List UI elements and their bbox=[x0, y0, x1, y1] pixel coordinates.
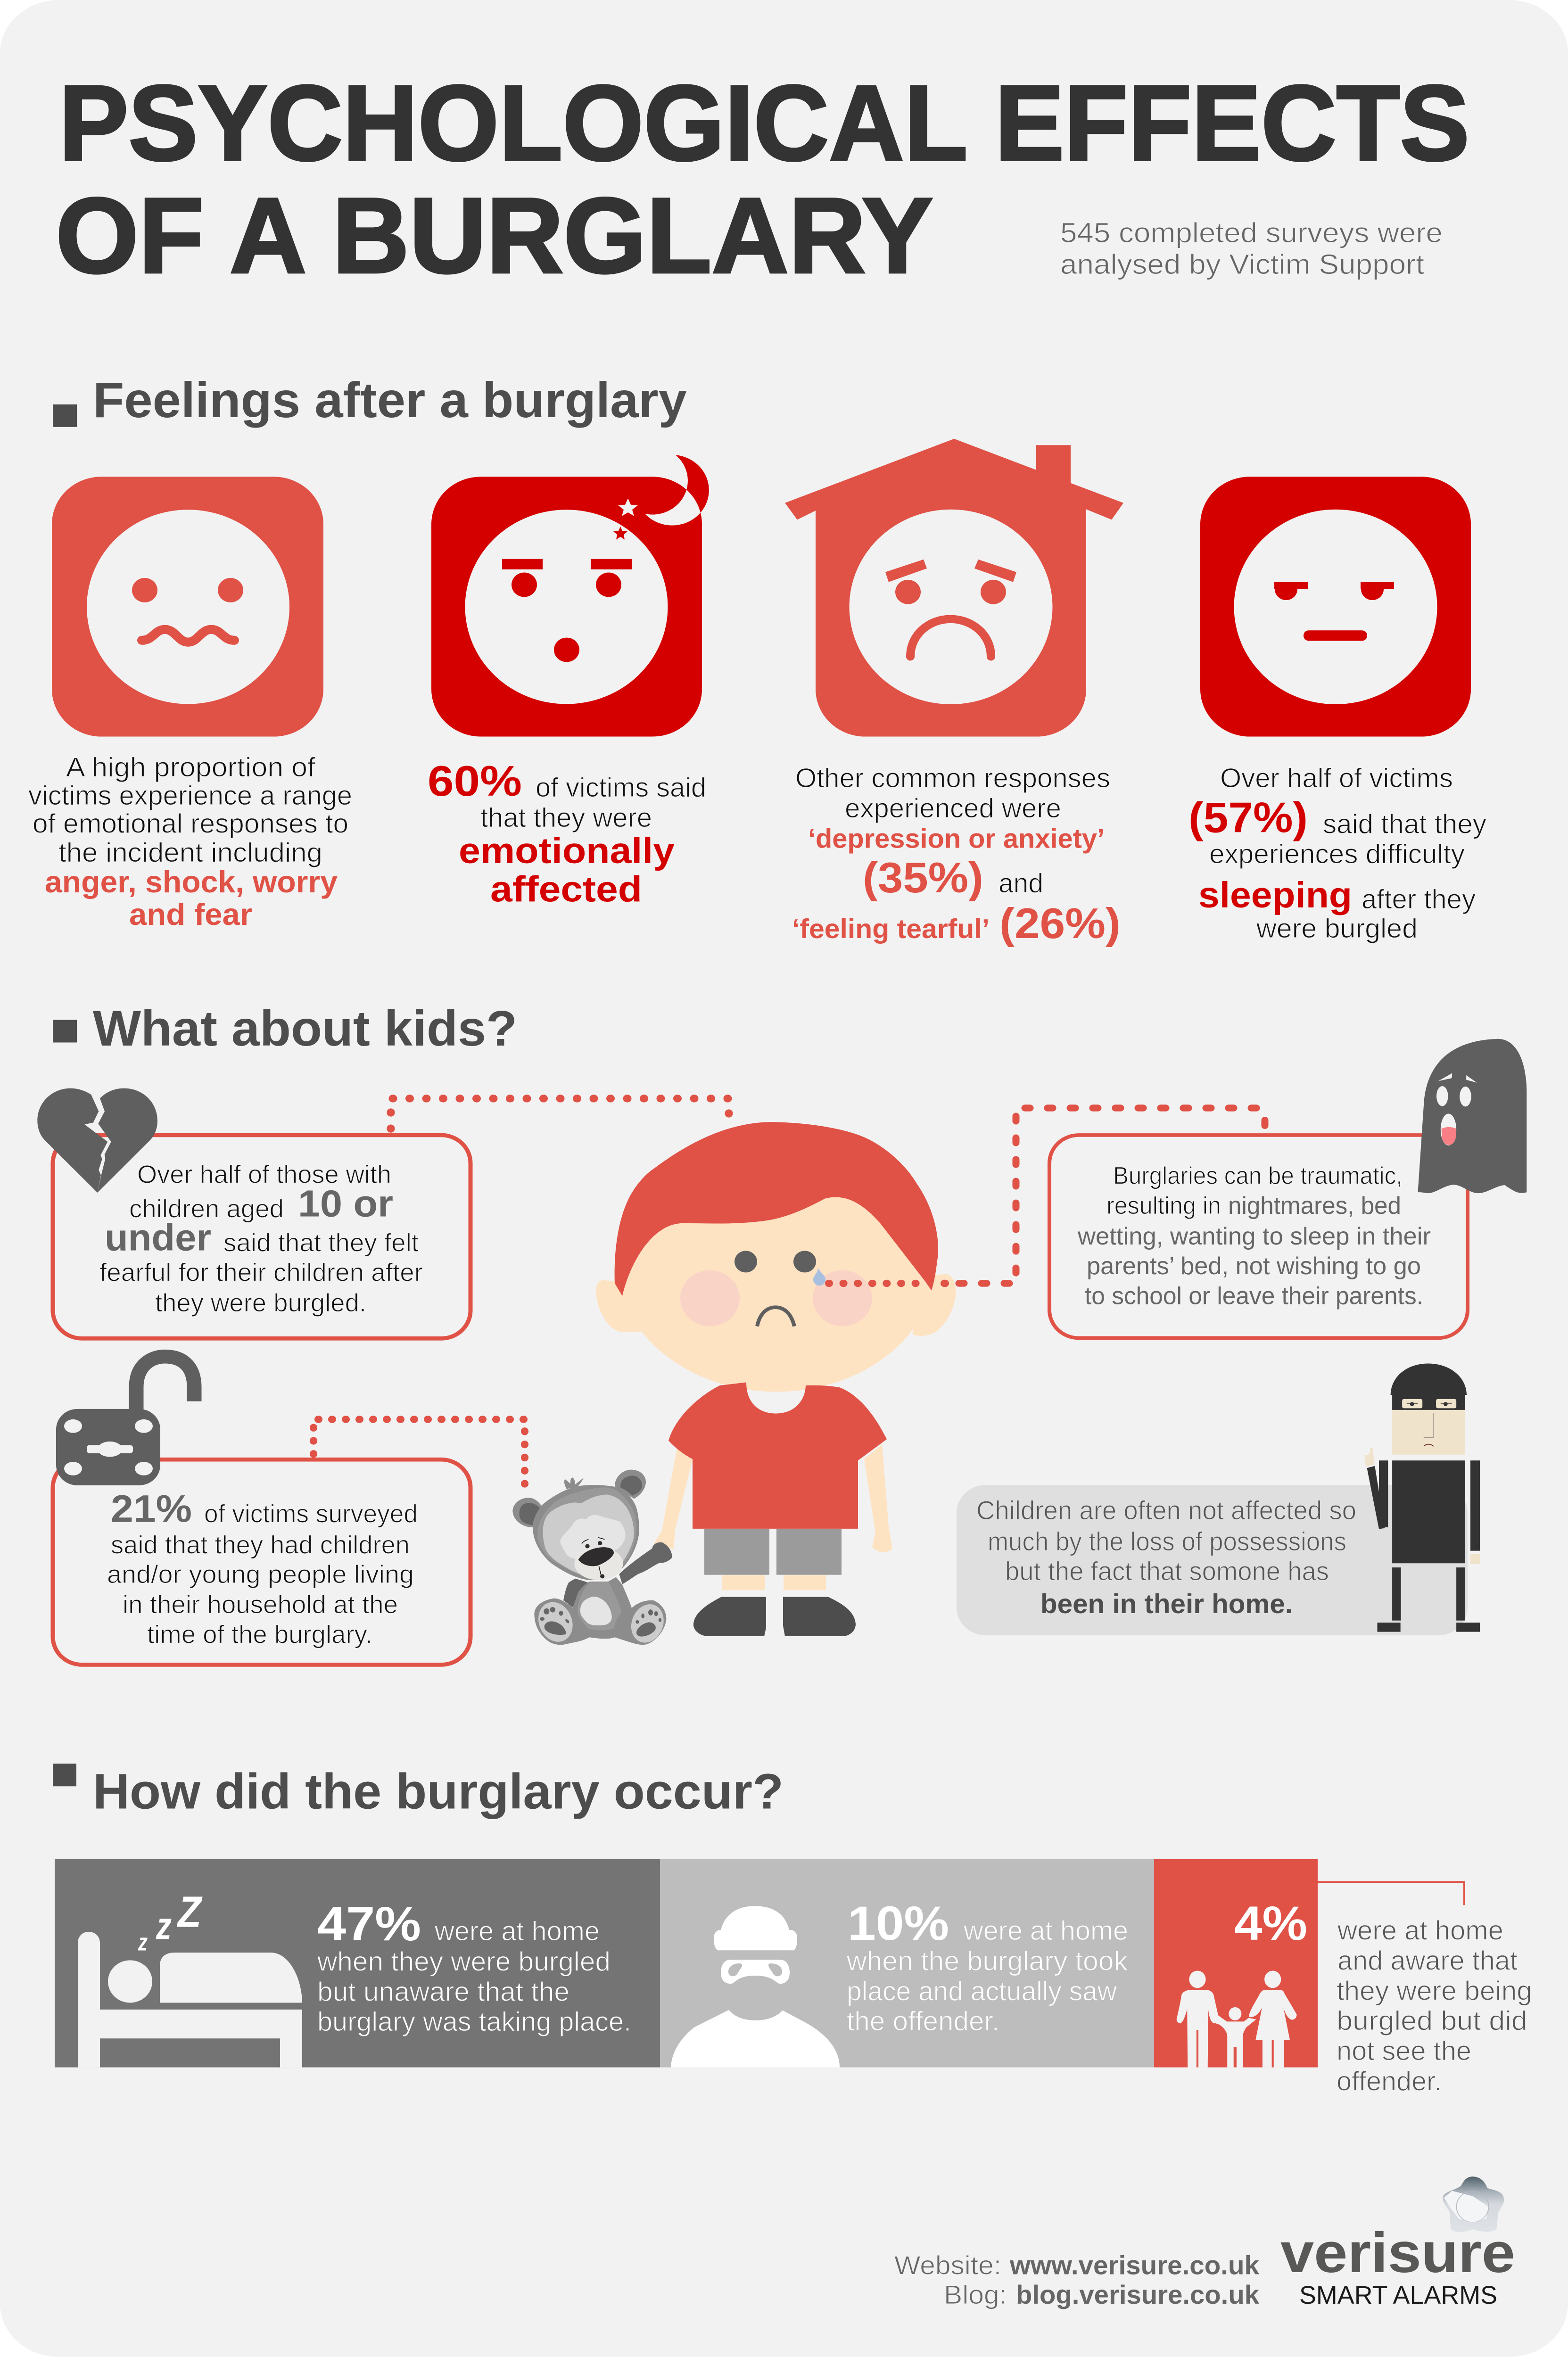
title: OF A BURGLARY bbox=[56, 176, 933, 296]
text: emotional responses: victims experience a range bbox=[28, 781, 352, 811]
callout: loss of possessions: but the fact that somone has bbox=[1005, 1557, 1329, 1586]
text: 4% aware of burglary: were at home bbox=[1337, 1915, 1503, 1945]
icon: family bbox=[1177, 1971, 1296, 2068]
icon: burglar bust bbox=[671, 1906, 840, 2068]
callout: 21% of victims surveyed: of victims surveyed bbox=[204, 1500, 418, 1528]
text: depression or anxiety, feeling tearful bbox=[792, 763, 1121, 948]
text: 60% emotionally affected bbox=[428, 757, 706, 909]
callout: burglaries can be traumatic bbox=[1049, 1135, 1468, 1338]
boy arms bbox=[654, 1444, 892, 1552]
logo: verisure smart alarms bbox=[1280, 2176, 1515, 2309]
text: 47% bbox=[317, 1897, 631, 2037]
callout: burglaries can be traumatic: to school or leave their parents. bbox=[1085, 1282, 1423, 1310]
icon: sleeping person in bed: z bbox=[156, 1904, 172, 1947]
boy legs bbox=[722, 1575, 826, 1590]
text: 4% aware of burglary bbox=[1337, 1915, 1532, 2096]
subtitle: survey note: 545 completed surveys were bbox=[1060, 217, 1443, 248]
text: emotional responses bbox=[28, 752, 352, 932]
text: 57% difficulty sleeping: were burgled bbox=[1256, 914, 1418, 944]
text: 4% aware of burglary: they were being bbox=[1337, 1976, 1532, 2006]
text: 60% emotionally affected: affected bbox=[490, 869, 642, 909]
text: 47%: but unaware that the bbox=[317, 1977, 569, 2007]
text: 57% difficulty sleeping bbox=[1188, 763, 1487, 944]
text: 47%: were at home bbox=[434, 1916, 600, 1946]
text: 57% difficulty sleeping: experiences difficulty bbox=[1209, 839, 1465, 869]
text: depression or anxiety, feeling tearful: and bbox=[999, 868, 1043, 898]
callout: children aged 10 or under: Over half of those with bbox=[137, 1160, 391, 1188]
text: 57% difficulty sleeping: said that they bbox=[1323, 809, 1487, 839]
boy ears and head bbox=[596, 1129, 956, 1392]
icon: teddy bear bbox=[512, 1470, 672, 1647]
text: depression or anxiety, feeling tearful: experienced were bbox=[845, 793, 1061, 824]
callout: 21% of victims surveyed bbox=[53, 1459, 470, 1665]
panel: 4% aware: 4% bbox=[1234, 1896, 1307, 1951]
text: 60% emotionally affected: emotionally bbox=[459, 830, 675, 871]
icon: burglar figure bbox=[1364, 1364, 1480, 1632]
icon: ghost bbox=[1418, 1039, 1527, 1193]
callout: burglaries can be traumatic: parents’ bed, not wishing to go bbox=[1087, 1253, 1421, 1280]
callout: burglaries can be traumatic: Burglaries can be traumatic, bbox=[1113, 1162, 1403, 1189]
callout: children aged 10 or under: they were burgled. bbox=[155, 1288, 366, 1317]
text: depression or anxiety, feeling tearful: ‘depression or anxiety’ bbox=[808, 824, 1105, 854]
icon: sleepless face bbox=[1200, 477, 1471, 736]
text: 10% bbox=[846, 1896, 1128, 2036]
text: emotional responses: the incident including bbox=[58, 838, 322, 868]
text: 10%: the offender. bbox=[847, 2006, 999, 2036]
text: 4% aware of burglary: burgled but did bbox=[1337, 2006, 1527, 2036]
icon: open padlock bbox=[56, 1357, 194, 1485]
text: depression or anxiety, feeling tearful: (35%) bbox=[863, 854, 983, 902]
dotted connector: tear to nightmare box bbox=[829, 1108, 1265, 1283]
text: emotional responses: anger, shock, worry bbox=[45, 865, 338, 899]
dotted connector: box two to teddy bbox=[314, 1419, 525, 1494]
callout: loss of possessions: been in their home. bbox=[1040, 1589, 1293, 1619]
text: 57% difficulty sleeping: after they bbox=[1362, 884, 1476, 914]
text: 47%: burglary was taking place. bbox=[317, 2007, 631, 2037]
footer: website and blog links: Blog: bbox=[944, 2281, 1007, 2310]
text: 60% emotionally affected: of victims said bbox=[536, 773, 706, 803]
heading: how did the burglary occur: How did the burglary occur? bbox=[93, 1763, 784, 1819]
text: 57% difficulty sleeping: (57%) bbox=[1188, 794, 1308, 841]
boy shoes bbox=[693, 1597, 856, 1636]
callout: children aged 10 or under: under bbox=[105, 1217, 211, 1259]
text: 10%: were at home bbox=[963, 1916, 1128, 1946]
boy hair bbox=[615, 1122, 938, 1296]
callout: 21% of victims surveyed: said that they had children bbox=[111, 1531, 410, 1559]
icon: shocked face with moon bbox=[431, 455, 709, 736]
callout: children aged 10 or under: said that they felt bbox=[223, 1228, 419, 1257]
text: depression or anxiety, feeling tearful: Other common responses bbox=[795, 763, 1110, 793]
text: 57% difficulty sleeping: sleeping bbox=[1198, 874, 1352, 915]
boy face details bbox=[680, 1251, 872, 1326]
text: emotional responses: A high proportion of bbox=[66, 752, 316, 783]
icon: sleeping person in bed bbox=[78, 1887, 302, 2068]
panel: 10% saw the offender bbox=[660, 1859, 1154, 2068]
callout: children aged 10 or under bbox=[53, 1135, 470, 1338]
callout: loss of possessions bbox=[957, 1485, 1468, 1635]
text: 57% difficulty sleeping: Over half of victims bbox=[1220, 763, 1453, 793]
text: 10%: 10% bbox=[848, 1896, 949, 1951]
text: 60% emotionally affected: that they were bbox=[480, 803, 652, 833]
callout: 21% of victims surveyed: 21% bbox=[111, 1487, 192, 1530]
dotted connector: box one to boy bbox=[391, 1098, 729, 1129]
connector: 4% panel to text bbox=[1318, 1882, 1464, 1905]
text: 4% aware of burglary: and aware that bbox=[1337, 1946, 1518, 1976]
icon: sad face in house bbox=[785, 439, 1123, 736]
text: depression or anxiety, feeling tearful: (26%) bbox=[999, 899, 1121, 948]
panel: 4% aware bbox=[1154, 1859, 1318, 2068]
text: 47%: when they were burgled bbox=[317, 1947, 611, 1977]
footer: website and blog links: www.verisure.co.uk bbox=[1009, 2251, 1259, 2280]
text: 47%: 47% bbox=[317, 1897, 421, 1951]
heading: feelings after a burglary: Feelings after a burglary bbox=[93, 372, 687, 428]
callout: burglaries can be traumatic: resulting in bbox=[1106, 1192, 1221, 1220]
subtitle: survey note: analysed by Victim Support bbox=[1060, 248, 1424, 280]
text: 4% aware of burglary: offender. bbox=[1337, 2067, 1442, 2096]
callout: loss of possessions: Children are often not affected so bbox=[976, 1496, 1356, 1525]
logo: verisure smart alarms: SMART ALARMS bbox=[1299, 2281, 1497, 2309]
callout: 21% of victims surveyed: and/or young people living bbox=[107, 1560, 414, 1589]
text: 10%: place and actually saw bbox=[847, 1977, 1117, 2006]
icon: sleeping person in bed: z bbox=[138, 1929, 148, 1956]
icon: sleeping person in bed: Z bbox=[176, 1887, 203, 1937]
callout: children aged 10 or under: 10 or bbox=[298, 1183, 393, 1225]
footer: website and blog links: Website: bbox=[894, 2251, 1001, 2280]
callout: children aged 10 or under: children aged bbox=[129, 1195, 284, 1223]
text: 60% emotionally affected: 60% bbox=[428, 757, 522, 805]
text: depression or anxiety, feeling tearful: ‘feeling tearful’ bbox=[792, 914, 990, 944]
callout: 21% of victims surveyed: in their household at the bbox=[123, 1590, 398, 1619]
text: emotional responses: of emotional responses to bbox=[33, 809, 348, 839]
boy shorts bbox=[704, 1529, 842, 1575]
panel: 47% unaware bbox=[55, 1859, 660, 2068]
footer: website and blog links: blog.verisure.co.uk bbox=[1016, 2281, 1259, 2310]
subtitle: survey note bbox=[1060, 217, 1443, 280]
title bbox=[56, 64, 1469, 296]
logo: verisure smart alarms: verisure bbox=[1280, 2221, 1515, 2284]
text: 4% aware of burglary: not see the bbox=[1337, 2036, 1471, 2066]
callout: loss of possessions: much by the loss of possessions bbox=[988, 1527, 1346, 1557]
boy shirt bbox=[668, 1382, 887, 1529]
icon: broken heart bbox=[37, 1088, 157, 1193]
callout: burglaries can be traumatic: wetting, wanting to sleep in their bbox=[1077, 1223, 1431, 1250]
text: emotional responses: and fear bbox=[129, 898, 252, 932]
callout: children aged 10 or under: fearful for their children after bbox=[99, 1258, 423, 1286]
illustration: sad boy bbox=[596, 1122, 956, 1636]
callout: burglaries can be traumatic: nightmares, bed bbox=[1228, 1192, 1401, 1220]
footer: website and blog links bbox=[894, 2251, 1259, 2310]
title: PSYCHOLOGICAL EFFECTS bbox=[59, 64, 1469, 183]
callout: 21% of victims surveyed: time of the burglary. bbox=[147, 1620, 372, 1648]
heading: what about kids: What about kids? bbox=[93, 1000, 517, 1056]
icon: worried face bbox=[52, 477, 323, 736]
text: 10%: when the burglary took bbox=[846, 1946, 1128, 1976]
